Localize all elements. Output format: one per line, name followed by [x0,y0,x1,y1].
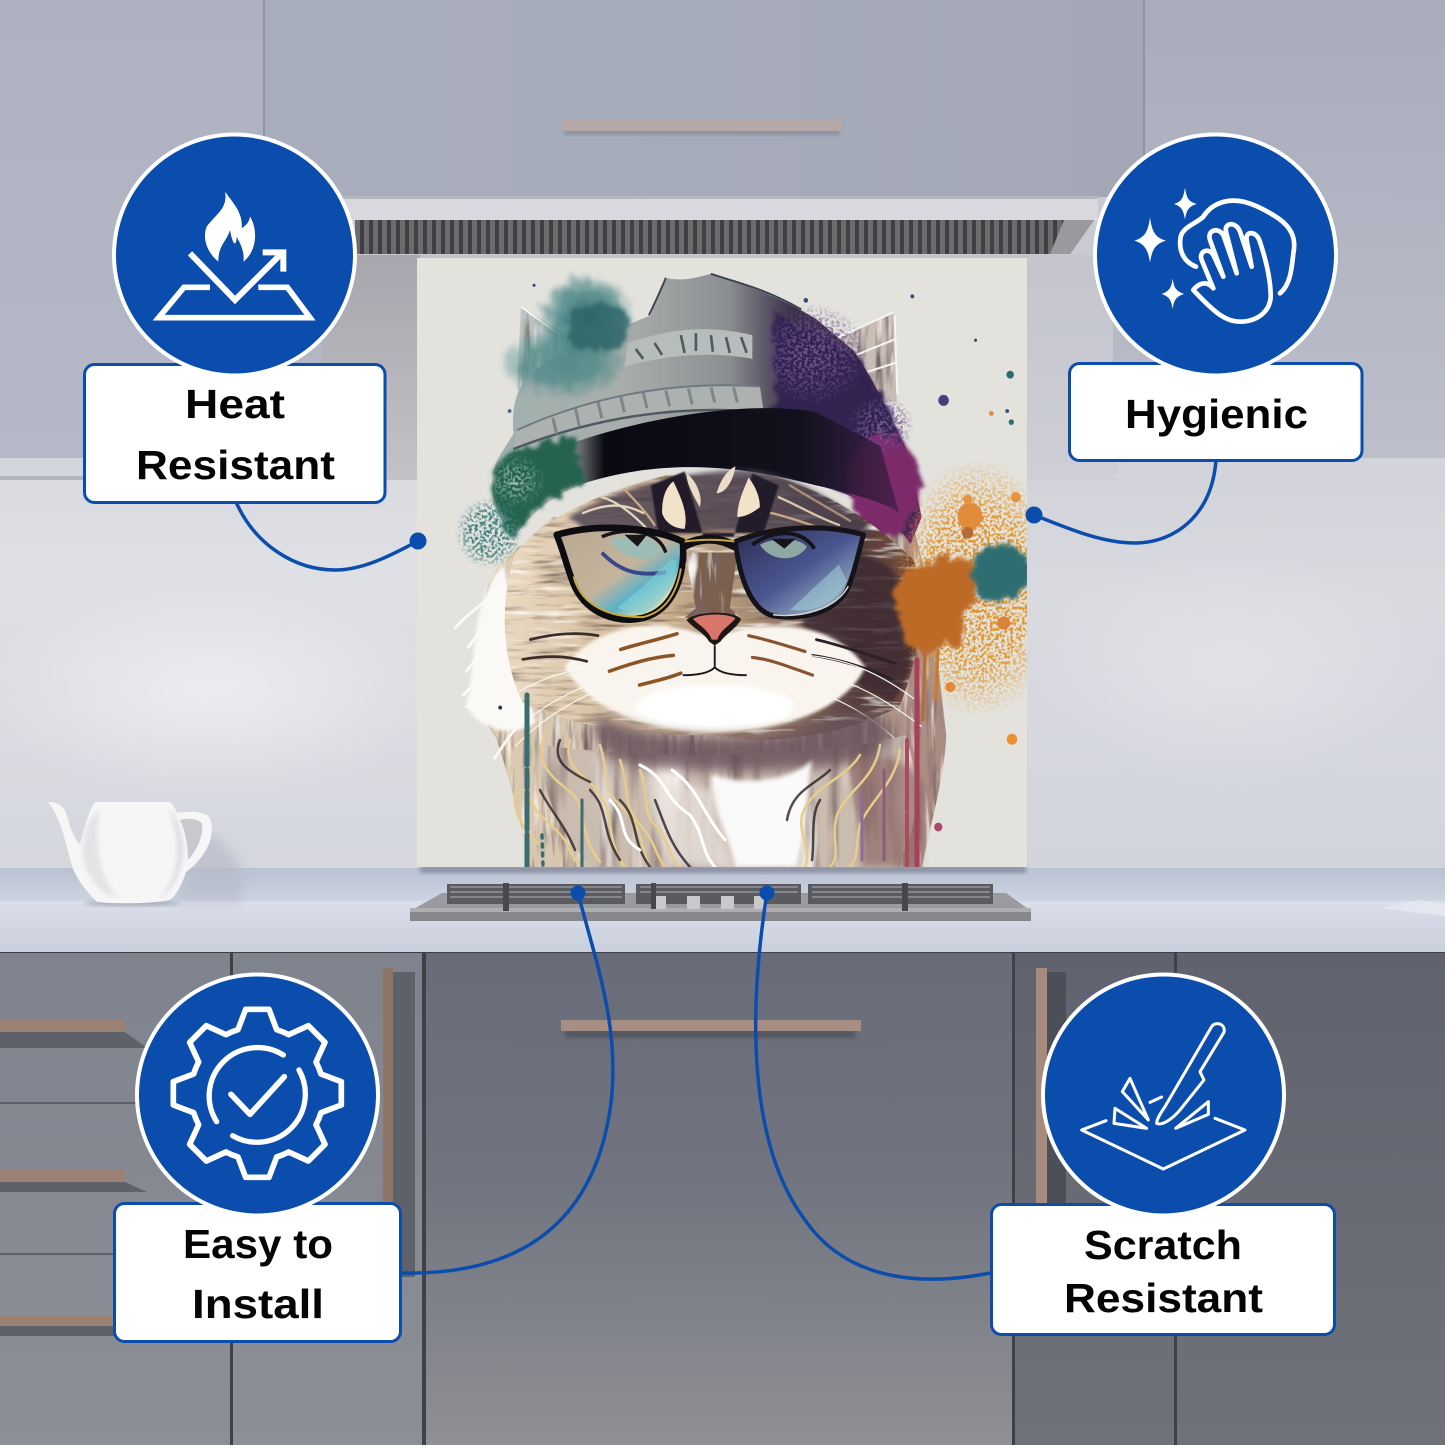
chest base [543,735,916,867]
glasses [557,528,863,620]
upper cabinets [0,0,1445,480]
whiskers [508,655,922,750]
dark brow fur [568,470,873,533]
callout: Heat Resistant [84,134,385,502]
icon circle [1095,134,1336,376]
fur mane [455,517,946,869]
label text: Scratch [1084,1222,1242,1268]
forehead tabby stripes [583,466,850,537]
chest fur [515,650,938,867]
connector: Scratch Resistant to hob [756,886,990,1279]
cabinet handle [562,119,842,135]
callout: Scratch Resistant [992,974,1334,1334]
hat bands [513,274,801,449]
hob [410,883,1031,921]
left eye [602,531,666,574]
white chest centre [711,760,812,867]
label box [992,1204,1334,1334]
hat crown [492,274,922,545]
right plum fur [850,756,925,867]
right eye [752,533,814,558]
dark right cheek [801,549,915,703]
control knobs [653,896,767,909]
left lens [560,530,681,618]
nose bridge [685,553,741,618]
icon circle [1043,974,1284,1216]
white left fur [466,564,536,731]
paint drips [527,650,938,867]
burner grates [447,884,993,904]
cat face [505,466,922,750]
callout: Hygienic [1070,134,1362,460]
white strands [610,765,725,867]
panel background [417,258,1027,867]
nose [687,613,741,646]
purple paint [756,303,920,537]
label box [1070,364,1362,460]
frames [557,528,863,620]
hat [485,274,922,545]
dark hat brim [564,408,899,513]
callout: Easy to Install [114,974,400,1342]
icon circle [137,974,378,1216]
icon: hand wiping with sparkles [1134,188,1294,322]
teal paint cloud [500,274,636,398]
tiled wall [0,255,1445,875]
icon: flame over surface [159,192,310,318]
icon circle [114,134,355,376]
cabinet handles [0,968,1066,1336]
label text [1064,1222,1263,1321]
label text: Resistant [1064,1275,1263,1321]
icon: knife scratching surface [1082,1024,1245,1169]
icon: gear with check [173,1009,341,1177]
splashback panel: watercolour cat [417,258,1065,869]
connector: Hygienic to panel [1026,460,1216,543]
connector: Easy to Install to hob [402,886,613,1273]
orange paint splash [890,460,1027,745]
green brim end [485,440,585,537]
label text [136,381,335,488]
connector: Heat Resistant to panel [236,502,426,570]
label box [84,364,385,502]
ears [517,305,897,402]
label text: Hygienic [1125,391,1308,437]
label text: Resistant [136,442,335,488]
paint droplets [498,284,1014,831]
label text: Heat [185,381,285,427]
mouth [683,646,747,675]
teal speckle left [455,497,523,568]
panel shadow [420,865,1026,873]
label text: Easy to [183,1221,333,1267]
lower cabinets [0,952,1445,1445]
dark plum under-chin band [594,711,889,771]
pale chest wash [649,770,735,867]
teapot [48,802,244,906]
dark strands [540,740,830,867]
golden strands [515,735,900,867]
right lens [737,530,862,615]
label text: Install [192,1281,324,1327]
white muzzle [564,626,865,733]
brow strands [583,485,850,529]
label text [183,1221,333,1327]
extractor hood [320,196,1098,254]
countertop [0,868,1445,953]
label box [114,1204,400,1342]
cheek stripes [523,634,895,685]
